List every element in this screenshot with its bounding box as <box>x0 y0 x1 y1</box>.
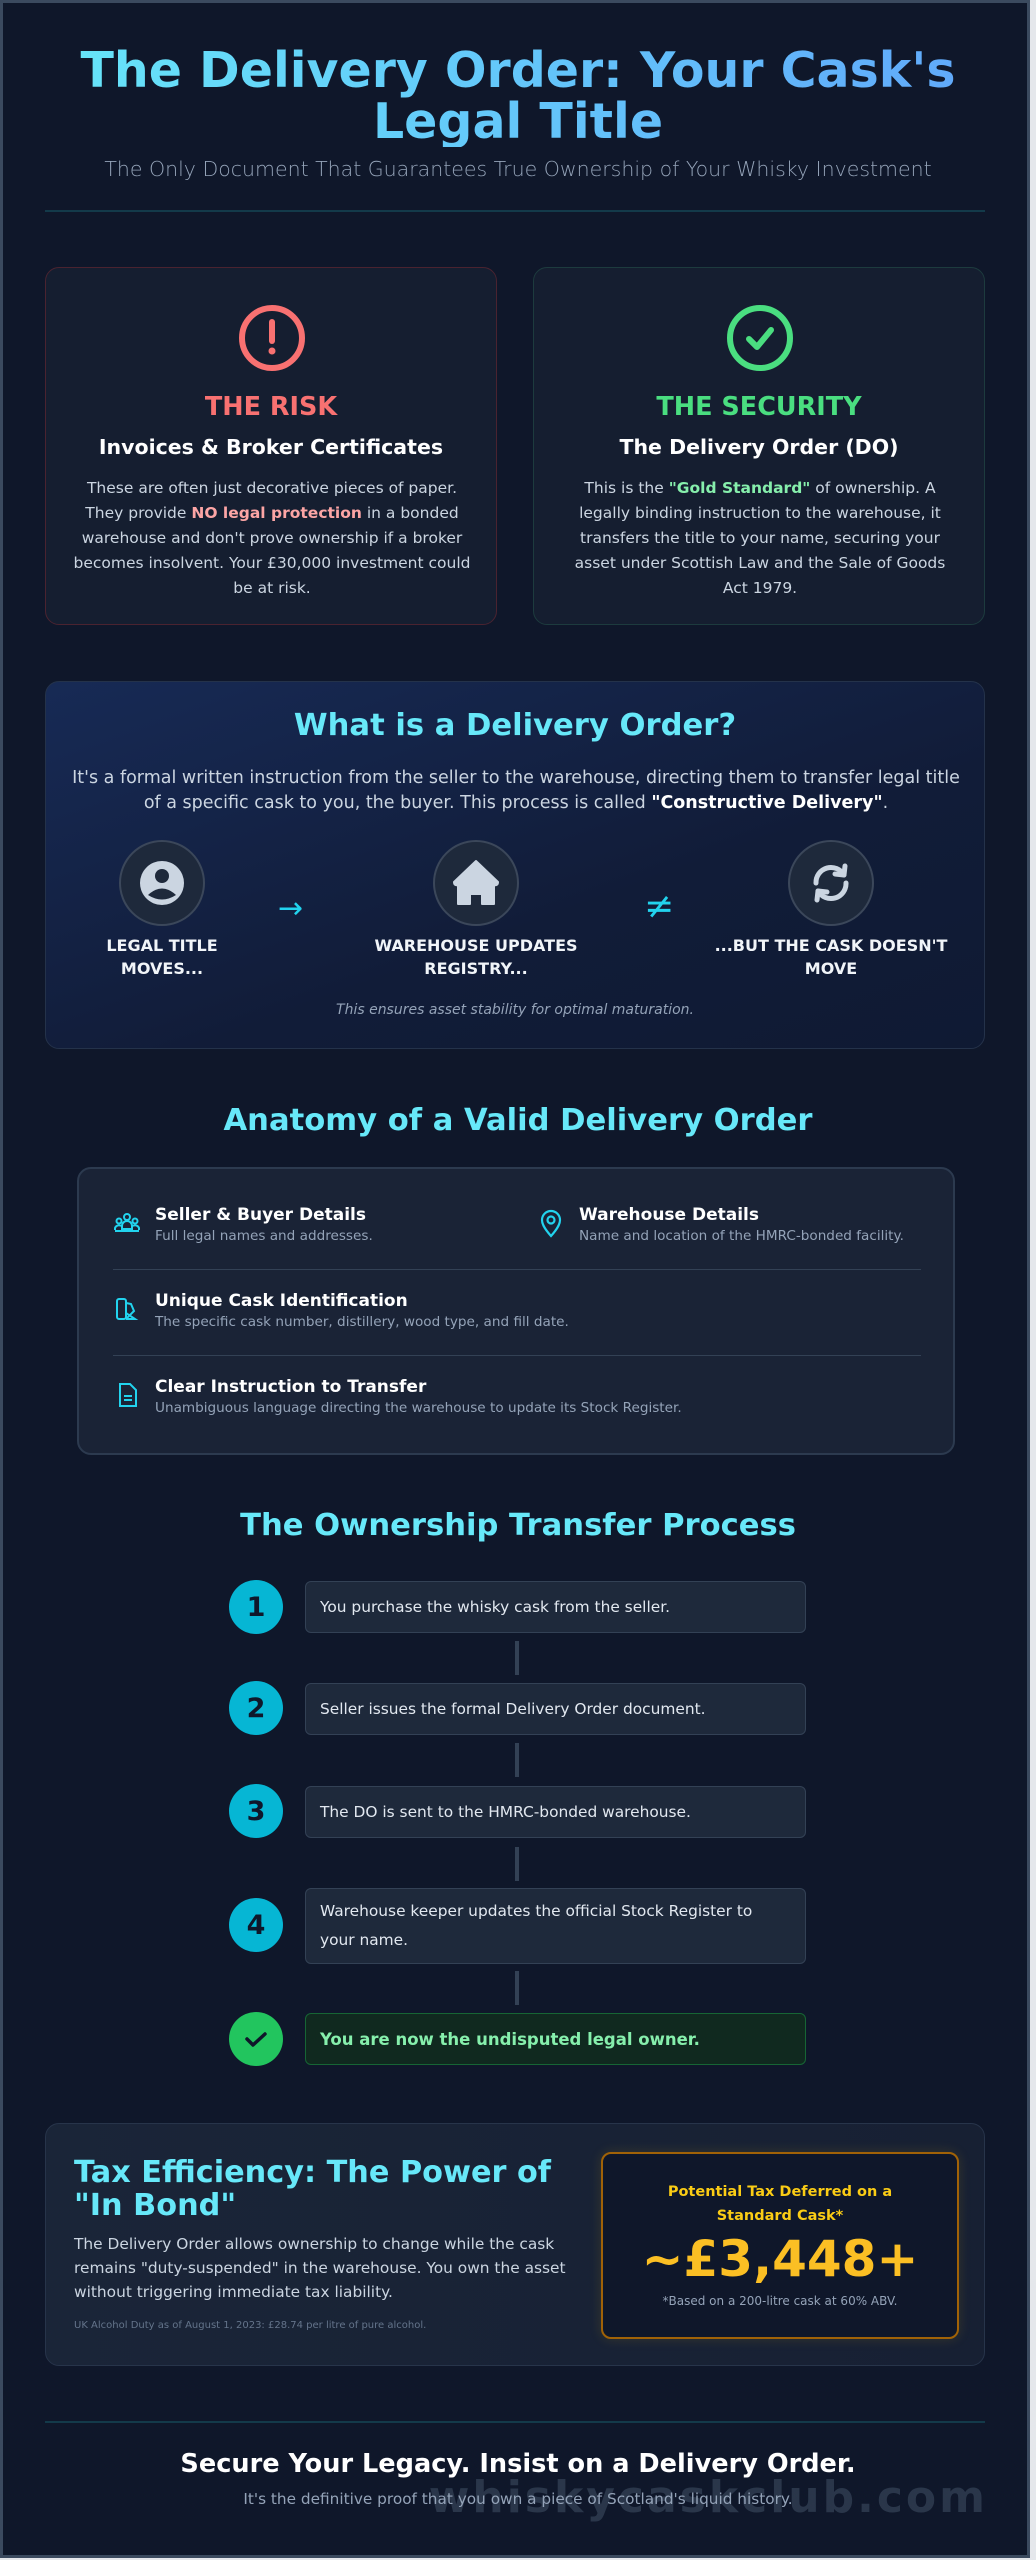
label: ...BUT THE CASK DOESN'T MOVE <box>715 936 947 978</box>
symbol: not equal: ≠ <box>644 886 674 927</box>
item: cask id: The specific cask number, distillery, wood type, and fill date. <box>155 1314 569 1330</box>
callout: tax deferred: *Based on a 200-litre cask at 60% ABV. <box>663 2294 897 2308</box>
panel: anatomy <box>77 1167 955 1455</box>
item: seller & buyer: Full legal names and addresses. <box>155 1228 373 1244</box>
text: The Delivery Order allows ownership to change while the cask remains "duty-suspended" in the warehouse. You own the asset without triggering immediate tax liability. <box>74 2235 566 2301</box>
process steps: You purchase the whisky cask from the seller. <box>320 1598 670 1616</box>
label: LEGAL TITLE MOVES... <box>106 936 218 978</box>
process steps: Warehouse keeper updates the official Stock Register to your name. <box>320 1902 752 1949</box>
heading: What is a Delivery Order? <box>294 708 736 743</box>
step 4 <box>229 1898 283 1952</box>
item: seller & buyer <box>114 1205 373 1244</box>
subheading: Invoices & Broker Certificates <box>99 435 443 459</box>
label: WAREHOUSE UPDATES REGISTRY... <box>374 936 578 978</box>
callout: tax deferred: Potential Tax Deferred on a Standard Cask* <box>668 2184 892 2224</box>
step 4: 4 <box>247 1910 265 1940</box>
icon: warning <box>239 305 305 371</box>
icon: refresh <box>788 840 874 926</box>
text: It's a formal written instruction from the seller to the warehouse, directing them to transfer legal title of a specific cask to you, the buyer. This process is called "Constructive Delivery". <box>72 768 960 813</box>
heading: THE RISK <box>205 392 337 422</box>
step 3 <box>229 1784 283 1838</box>
panel: the risk <box>45 267 497 625</box>
step 2 <box>229 1681 283 1735</box>
step 3: 3 <box>247 1796 265 1826</box>
item: warehouse: Name and location of the HMRC-bonded facility. <box>579 1228 904 1244</box>
heading: Tax Efficiency: The Power of "In Bond" <box>74 2155 551 2223</box>
item: warehouse <box>540 1205 904 1244</box>
footer headline: Secure Your Legacy. Insist on a Delivery Order. <box>180 2449 856 2479</box>
process steps <box>229 1580 806 2066</box>
step final <box>229 2012 283 2066</box>
process steps: You are now the undisputed legal owner. <box>320 2030 700 2048</box>
step 1: 1 <box>247 1592 265 1622</box>
process steps: The DO is sent to the HMRC-bonded warehouse. <box>320 1802 691 1820</box>
heading: anatomy: Anatomy of a Valid Delivery Order <box>224 1103 812 1138</box>
title <box>3 45 1033 147</box>
title: Legal Title <box>373 93 663 150</box>
icon: check <box>727 305 793 371</box>
callout: tax deferred: ~£3,448+ <box>642 2230 918 2288</box>
item: cask id: Unique Cask Identification <box>155 1291 408 1311</box>
note: This ensures asset stability for optimal maturation. <box>336 1002 694 1018</box>
watermark: whiskycaskclub.com <box>429 2472 988 2523</box>
fine print: UK Alcohol Duty as of August 1, 2023: £28.74 per litre of pure alcohol. <box>74 2320 426 2331</box>
item: seller & buyer: Seller & Buyer Details <box>155 1205 366 1225</box>
icon: house <box>433 840 519 926</box>
item: instruction: Unambiguous language directing the warehouse to update its Stock Register. <box>155 1400 682 1416</box>
subtitle: The Only Document That Guarantees True Ownership of Your Whisky Investment <box>104 157 932 181</box>
item: instruction <box>119 1377 682 1416</box>
callout: tax deferred <box>601 2152 959 2339</box>
process steps: Seller issues the formal Delivery Order document. <box>320 1700 706 1718</box>
subheading: The Delivery Order (DO) <box>619 435 898 459</box>
footer subtext: It's the definitive proof that you own a piece of Scotland's liquid history. <box>243 2490 793 2508</box>
panel: what is a delivery order <box>45 681 985 1049</box>
icon: person <box>119 840 205 926</box>
step 1 <box>229 1580 283 1634</box>
step 2: 2 <box>247 1692 265 1724</box>
item: warehouse: Warehouse Details <box>579 1205 759 1225</box>
arrow: → <box>278 891 303 926</box>
item: cask id <box>116 1291 569 1330</box>
panel: tax efficiency <box>45 2123 985 2366</box>
heading: process: The Ownership Transfer Process <box>240 1508 796 1543</box>
heading: THE SECURITY <box>656 392 862 422</box>
panel: the security <box>533 267 985 625</box>
title: The Delivery Order: Your Cask's <box>80 42 956 99</box>
text: This is the "Gold Standard" of ownership. A legally binding instruction to the warehouse, it transfers the title to your name, securing your asset under Scottish Law and the Sale of Goods Act 1979. <box>575 479 945 597</box>
text: These are often just decorative pieces of paper. They provide NO legal protection in a bonded warehouse and don't prove ownership if a broker becomes insolvent. Your £30,000 investment could be at risk. <box>74 479 470 597</box>
item: instruction: Clear Instruction to Transfer <box>155 1377 426 1397</box>
